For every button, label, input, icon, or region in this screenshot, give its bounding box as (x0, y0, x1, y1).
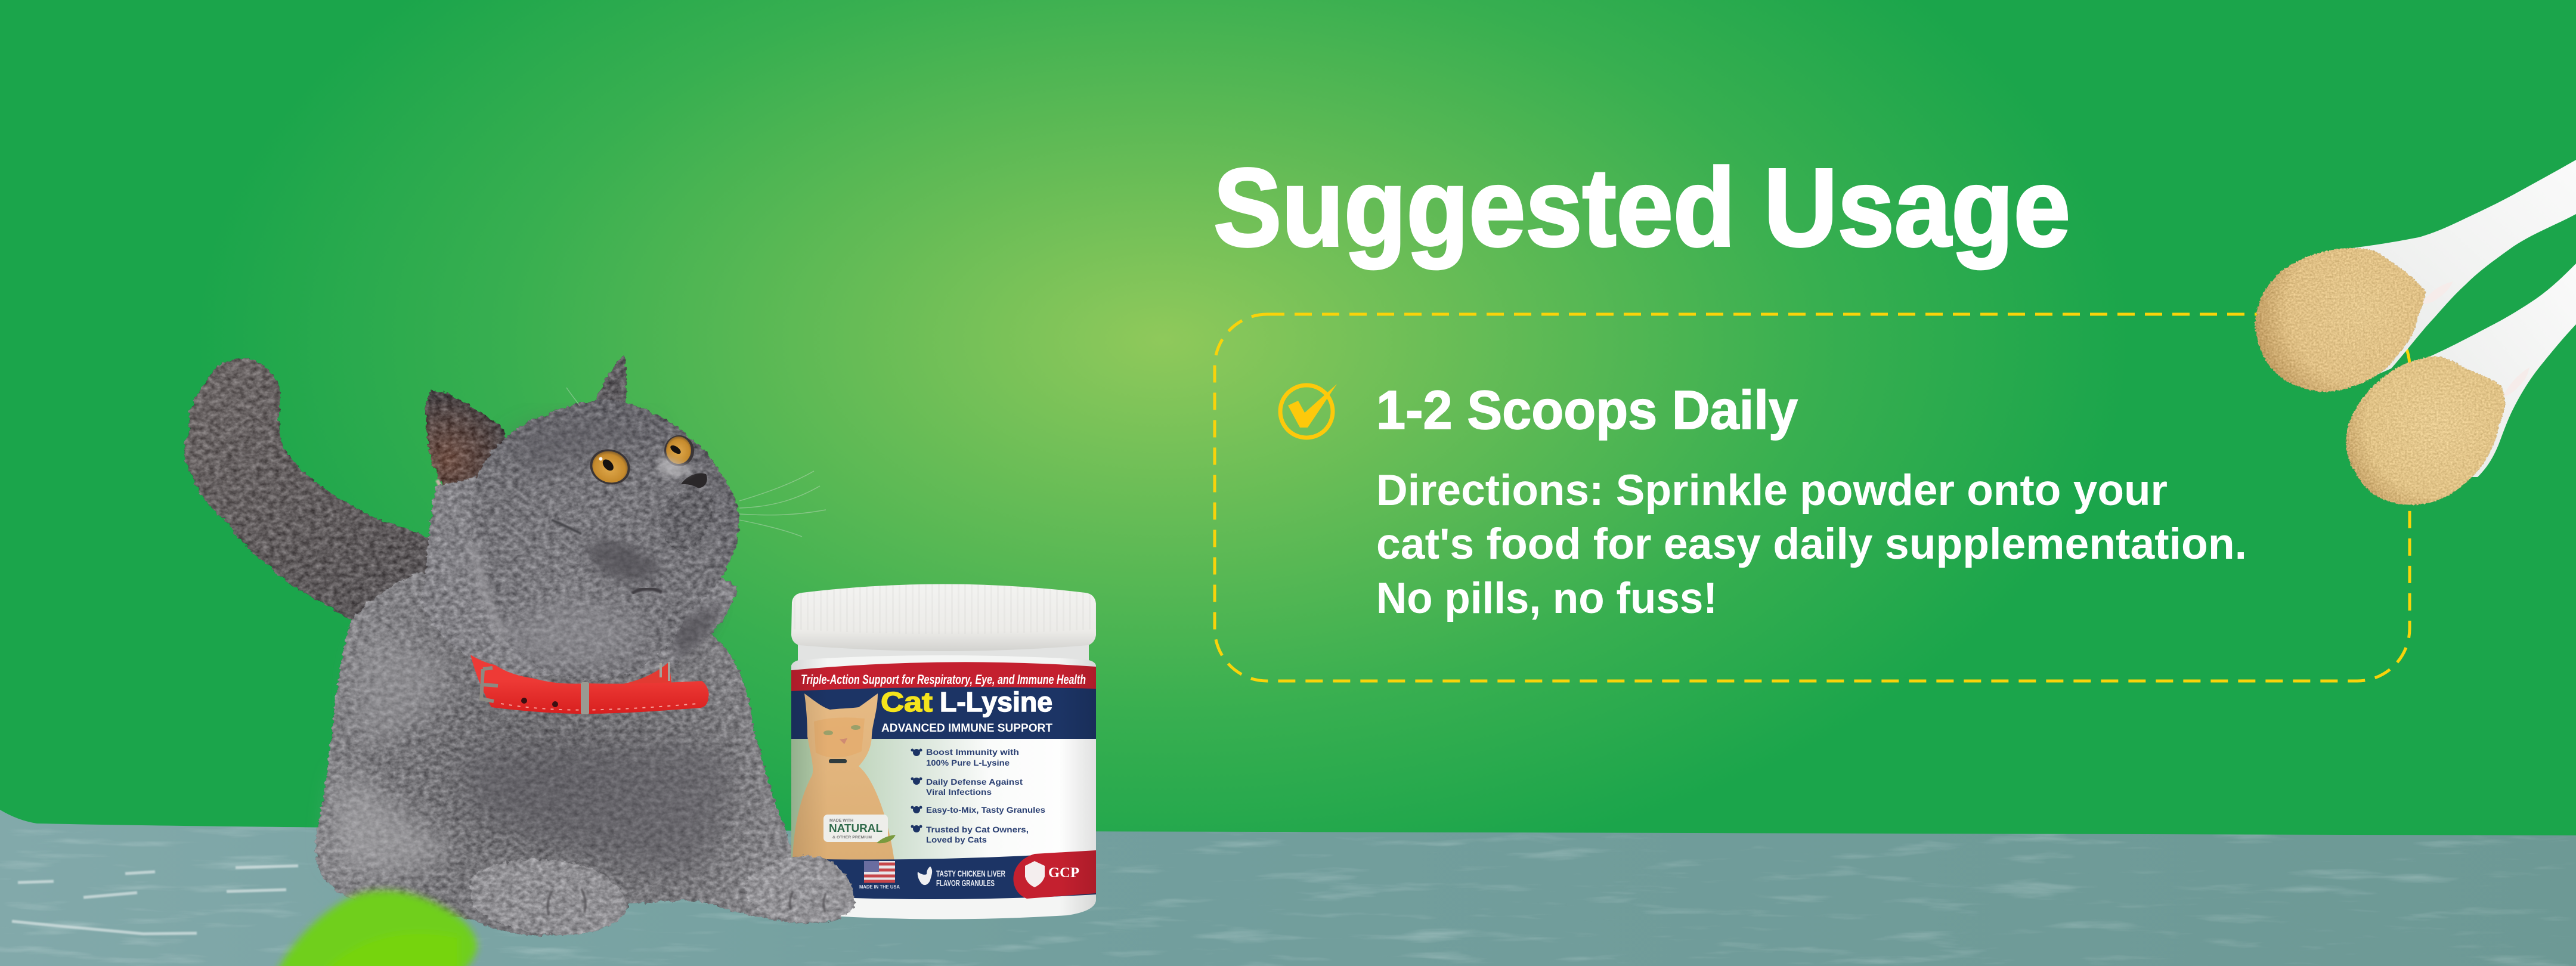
cat: left eye (586, 444, 634, 490)
cat: toe lines on paw (790, 891, 826, 912)
directions text: No pills, no fuss! (1376, 574, 1717, 623)
label text: benefits list: Viral Infections (926, 787, 992, 797)
label text: benefits list (926, 747, 1045, 844)
label: cat face markings (814, 717, 865, 758)
jar: lid (791, 584, 1096, 651)
cat: light jaw contour (473, 541, 507, 638)
label text: product name L-Lysine: L-Lysine (940, 686, 1052, 717)
cat (184, 355, 854, 936)
label text: subtitle: ADVANCED IMMUNE SUPPORT (881, 722, 1052, 735)
label icons: paw bullets (911, 749, 922, 832)
label text: benefits list: Easy-to-Mix, Tasty Granules (926, 805, 1045, 815)
cat: head (472, 400, 739, 680)
label text: flavor: FLAVOR GRANULES (936, 878, 995, 888)
cat: muzzle (659, 491, 711, 552)
label text: tagline: Triple-Action Support for Respiratory, Eye, and Immune Health (801, 672, 1086, 687)
cat: paw toe lines (547, 888, 586, 915)
label badge: natural (823, 815, 896, 843)
label: navy band (791, 687, 1096, 739)
label text: flavor (936, 869, 1005, 888)
label: red corner (1013, 850, 1096, 899)
cat: right eye (664, 435, 694, 466)
label text: benefits list: 100% Pure L-Lysine (926, 758, 1010, 767)
label text: made in usa: MADE IN THE USA (859, 884, 900, 890)
label text: benefits list: Trusted by Cat Owners, (926, 825, 1029, 834)
collar: buckle (481, 668, 498, 701)
table: white scratches (12, 866, 298, 934)
cat: mouth line (632, 589, 662, 593)
spoon: lower scoop (2346, 264, 2576, 505)
cat: dark neck on right (672, 602, 722, 659)
cat: body and paws (315, 572, 854, 936)
spoon handle and bowl (2409, 264, 2576, 477)
label: pale background (791, 737, 1096, 859)
cat: left ear (426, 391, 519, 513)
cat: cheek mark (552, 520, 581, 534)
spoon handle and bowl (2326, 160, 2576, 382)
dashed callout box (1215, 314, 2410, 681)
icon: yellow check circle (1280, 384, 1337, 438)
label text: flavor: TASTY CHICKEN LIVER (936, 869, 1005, 879)
cat: whiskers (566, 388, 826, 537)
label: cat eyes (823, 730, 833, 735)
collar: holes (521, 698, 527, 704)
label badge: natural: & OTHER PREMIUM (832, 836, 872, 840)
collar: keeper loop (581, 682, 589, 714)
cat: collar (470, 655, 709, 714)
label: cat collar (829, 759, 847, 763)
cat: light fur on left side (333, 769, 453, 874)
jar: neck (798, 644, 1089, 663)
cat: right ear (596, 355, 626, 405)
spoon highlight (2503, 367, 2529, 397)
label: orange cat (792, 693, 894, 862)
spoon: upper scoop (2255, 160, 2576, 392)
directions text (1376, 466, 2247, 623)
label icon: chicken (918, 866, 932, 885)
jar: cylinder shading (791, 655, 1096, 919)
cat: dark chest shading (465, 743, 732, 877)
heading: Suggested Usage (1213, 146, 2070, 270)
jar: body (791, 655, 1096, 919)
cat: front left paw (471, 859, 627, 935)
label text: GCP: GCP (1048, 865, 1079, 881)
directions text: cat's food for easy daily supplementation. (1376, 520, 2247, 568)
powder (2255, 248, 2426, 392)
label text: benefits list: Loved by Cats (926, 835, 987, 844)
cat: paw in front of jar (745, 856, 854, 923)
cat: nose (681, 473, 707, 488)
label text: benefits list: Boost Immunity with (926, 747, 1019, 757)
cat: light fur on shoulder (356, 639, 453, 745)
cat: raised paw and arm (184, 359, 435, 623)
label text: benefits list: Daily Defense Against (926, 777, 1023, 787)
cat: light bridge of nose (659, 453, 695, 476)
spoon highlight (2421, 281, 2453, 304)
label: navy bottom band (791, 852, 1096, 899)
label icon: USA flag (864, 861, 895, 883)
label: red top band (791, 662, 1096, 692)
subheading: 1-2 Scoops Daily (1376, 380, 1798, 441)
label badge: natural: MADE WITH (829, 819, 853, 823)
label text: product name: Cat (881, 686, 933, 717)
leaf: blurred foreground (277, 891, 477, 966)
cat: neck ruff (421, 477, 737, 677)
label: cat nose (840, 738, 847, 744)
directions text: Directions: Sprinkle powder onto your (1376, 466, 2168, 515)
table surface (0, 810, 2576, 966)
cat: shadow at top of forehead (507, 420, 662, 477)
cat: ear inner rim (437, 480, 465, 510)
powder (2346, 357, 2505, 505)
label icon: GCP shield (1025, 861, 1045, 887)
label badge: natural: NATURAL (829, 822, 883, 834)
jar: label (791, 662, 1096, 899)
cat: light chin (507, 602, 644, 668)
cat: muzzle and jaw shadow (584, 540, 662, 582)
collar: ring (661, 662, 669, 681)
product jar (791, 584, 1096, 919)
